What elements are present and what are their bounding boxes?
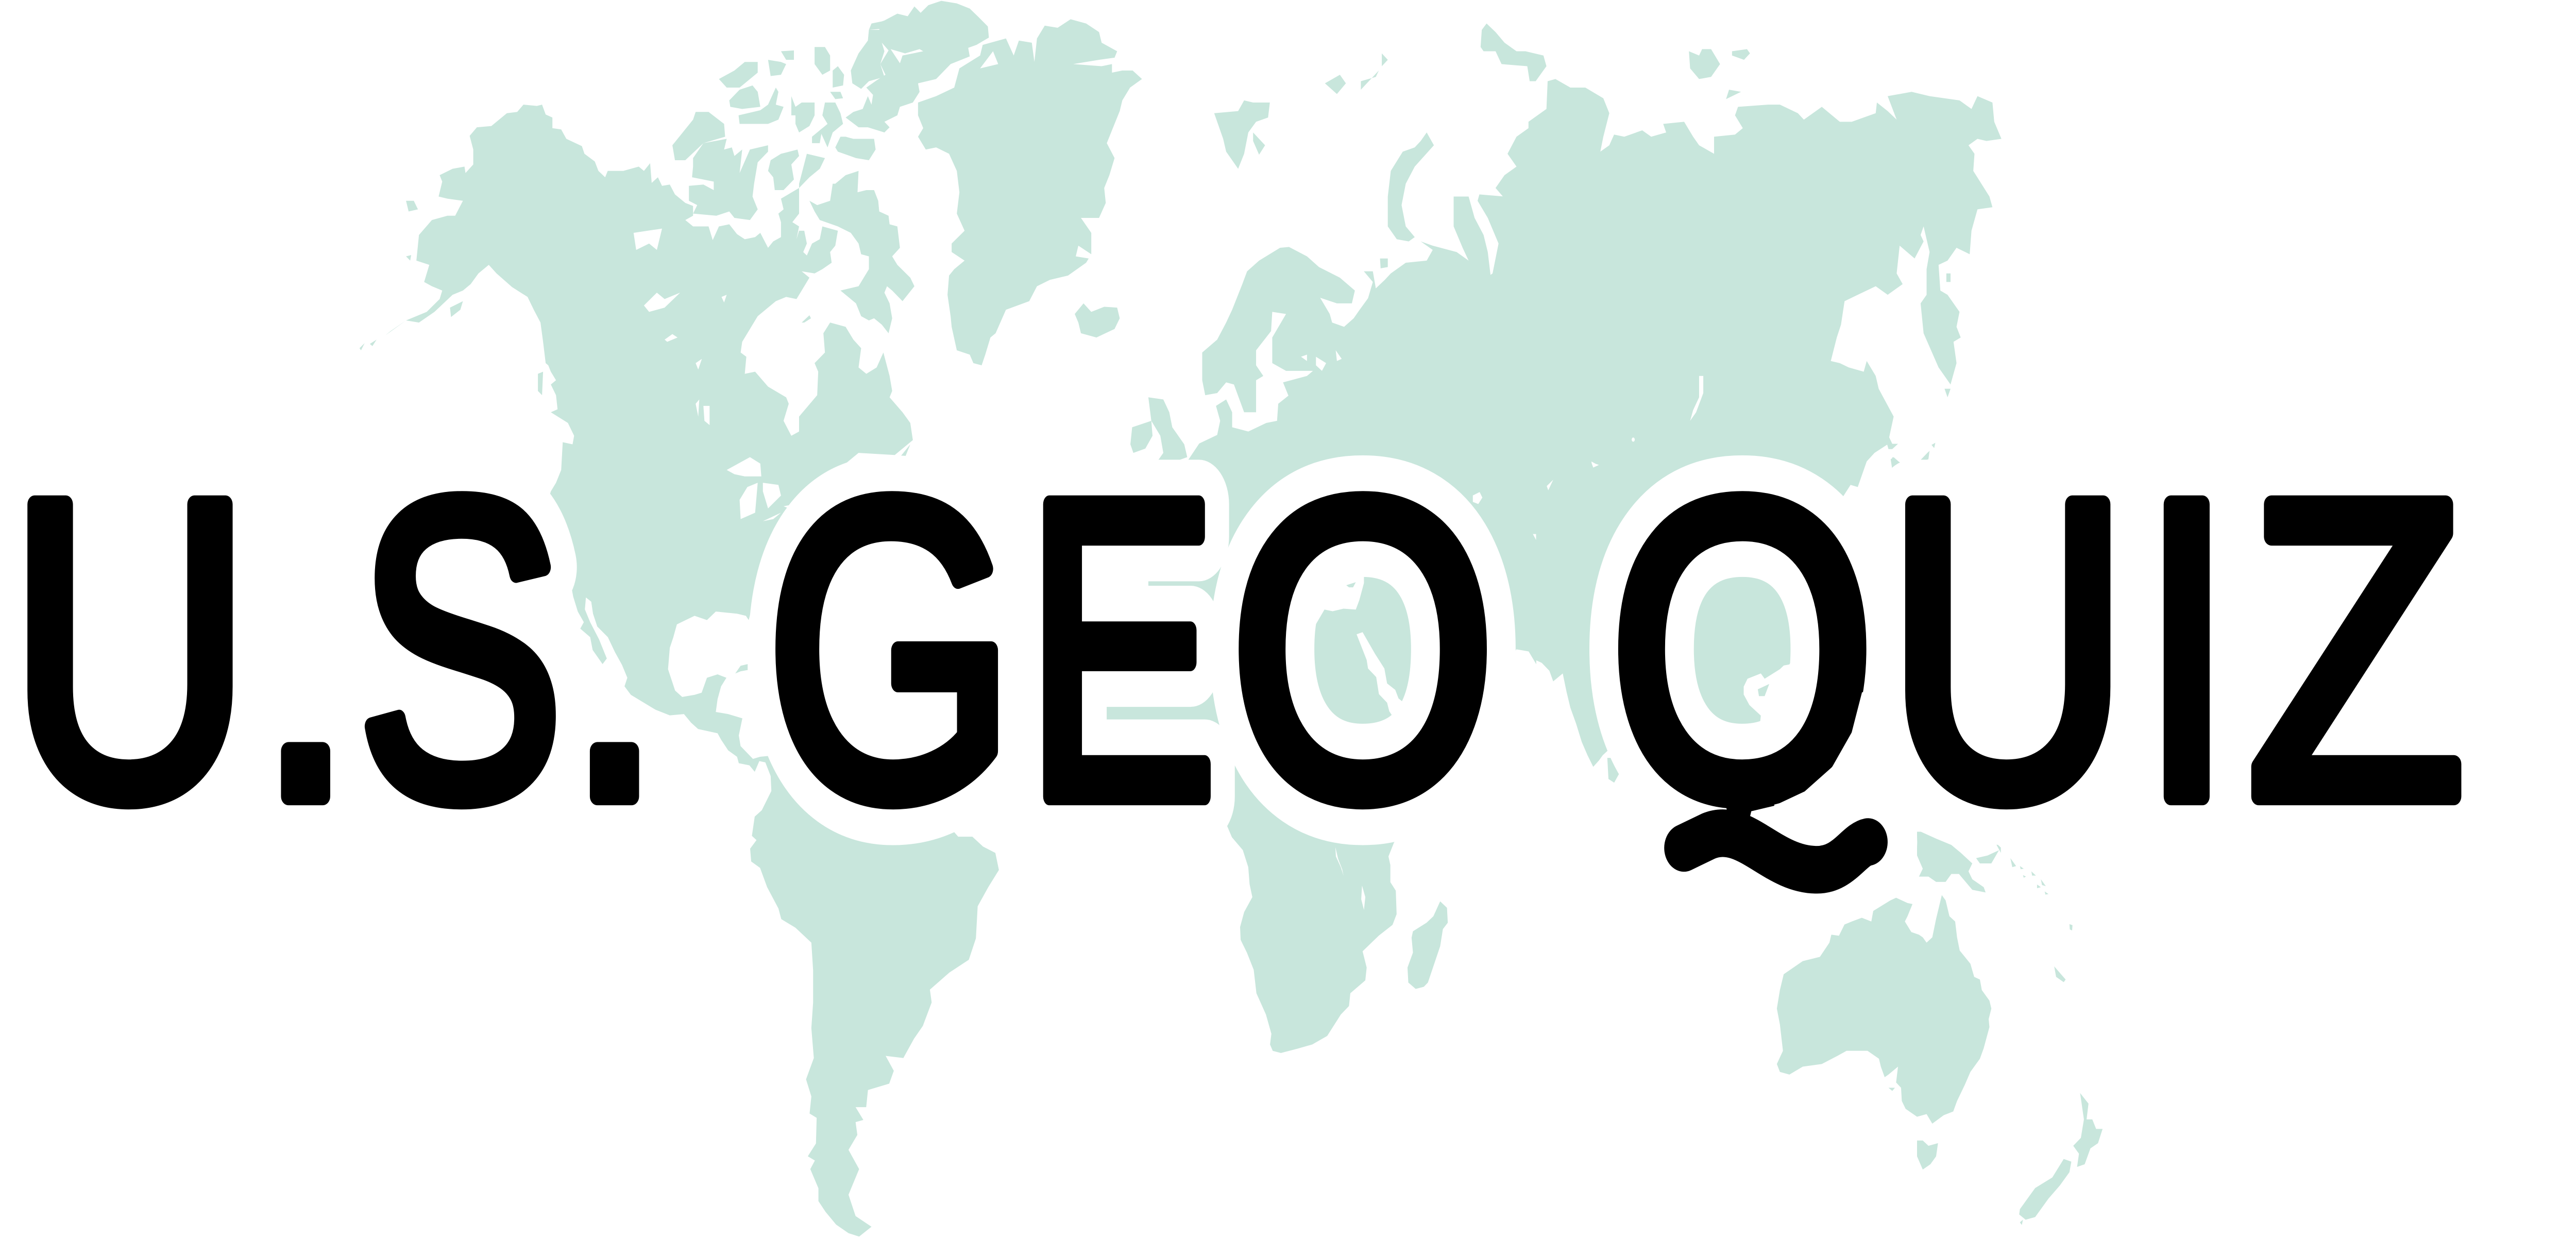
title: I: [2140, 413, 2234, 887]
title: S: [357, 412, 564, 887]
title: G: [766, 412, 1015, 887]
title: O: [1230, 412, 1496, 887]
title: .: [565, 412, 664, 887]
world map: [360, 1, 2103, 1236]
title: [9, 412, 2465, 887]
q letter swash tail: [1684, 833, 1868, 870]
title: Z: [2247, 413, 2465, 887]
landmass: north america, arctic islands and greenland: [360, 1, 1142, 577]
landmass: africa, arabia and madagascar: [1107, 455, 1536, 1053]
title: Q: [1609, 412, 1875, 887]
title: .: [256, 412, 355, 887]
patch masking the default q tail: [1741, 692, 1889, 853]
landmass: india, southeast asia and oceania: [1536, 412, 2103, 1225]
title: E: [1026, 413, 1217, 887]
title: U: [1886, 412, 2129, 887]
landmass: mexico, central america and south america: [570, 563, 999, 1236]
landmass: europe and asia: [1130, 24, 2002, 534]
halo behind title letters: [9, 412, 2465, 887]
title: U: [9, 412, 251, 887]
